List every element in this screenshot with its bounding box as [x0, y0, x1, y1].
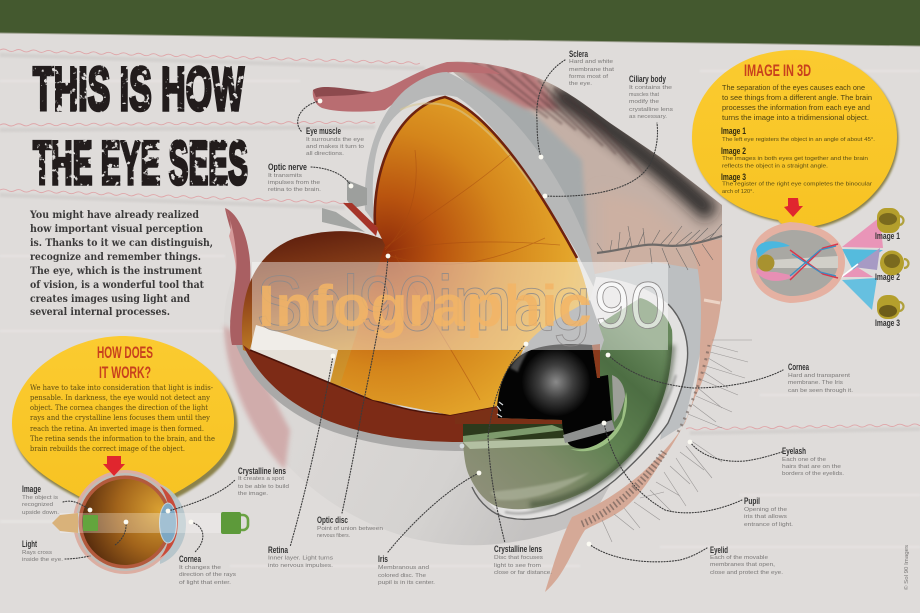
label: image [22, 484, 59, 516]
heading: IMAGE IN 3D [744, 61, 811, 80]
label: image: upside down. [22, 510, 59, 516]
image 2 text: Image 2 [721, 146, 746, 157]
label: crystalline lens: light to see from [494, 563, 541, 569]
labels image 1-3 [875, 231, 900, 328]
body text: reach the retina. An inverted image is then formed. [30, 425, 204, 433]
grey cut band [230, 320, 466, 451]
inverted mug [83, 515, 98, 531]
label: retina: into nervous impulses. [268, 563, 334, 569]
pale stripes in iris [463, 438, 572, 449]
optic nerve [347, 180, 367, 208]
label: ciliary body: Ciliary body [629, 74, 666, 84]
labels image 1-3: Image 3 [875, 318, 900, 328]
image 3 text: arch of 120°. [722, 189, 754, 195]
panel: image in 3D [692, 50, 908, 328]
label: sclera [569, 49, 615, 87]
label: crystalline lens left: It creates a spot [238, 476, 284, 482]
label: sclera: Hard and white [569, 59, 613, 65]
image 2 text [721, 146, 868, 170]
watermark panel: Infographic [258, 274, 592, 339]
green mug [221, 512, 248, 534]
pink skin side [616, 212, 617, 213]
label: eye muscle: It surrounds the eye [306, 137, 364, 143]
label: iris: Iris [378, 554, 388, 564]
body text: object. The cornea changes the direction of the light [30, 404, 208, 412]
label: light: Light [22, 539, 37, 549]
label: cornea: Hard and transparent [788, 373, 851, 379]
intro text: recognize and remember things. [30, 252, 201, 263]
labels image 1-3: Image 2 [875, 272, 900, 282]
label: cornea [788, 362, 853, 394]
body text: processes the information from each eye and [722, 103, 870, 112]
dark slab over iris [463, 422, 572, 445]
label: sclera: the eye. [569, 81, 593, 87]
balloon [12, 336, 238, 500]
green iris [463, 298, 672, 509]
pale wedge [250, 325, 338, 383]
heading: IT WORK? [99, 363, 151, 382]
body text [30, 384, 215, 453]
label: crystalline lens: Disc that focuses [494, 555, 543, 561]
heading [97, 343, 153, 382]
label: cornea: membrane. The Iris [788, 380, 843, 386]
label: eyelash: borders of the eyelids. [782, 471, 844, 477]
body text: We have to take into consideration that light is indis- [30, 384, 214, 392]
light beam [60, 513, 222, 533]
label: optic nerve: Optic nerve [268, 162, 307, 172]
image 2 text: reflects the object in a straight angle. [722, 164, 828, 170]
main eye illustration [224, 55, 752, 592]
label: light: Rays cross [22, 550, 52, 556]
label: eyelash: hairs that are on the [782, 464, 841, 470]
cup 2 [880, 250, 908, 276]
label: pupil [744, 496, 794, 528]
ribs [470, 60, 644, 174]
label: cornea left [179, 554, 236, 586]
label: crystalline lens left: Crystalline lens [238, 466, 286, 476]
intro text: several internal processes. [30, 307, 170, 318]
label: retina: Inner layer. Light turns [268, 556, 333, 562]
lid lash marks [582, 452, 664, 524]
outer sclera surface [447, 62, 722, 345]
eyelid skin strip [545, 240, 722, 592]
eye leader lines and dots [290, 60, 783, 562]
body text: The separation of the eyes causes each one [722, 83, 865, 92]
watermark panel: Sol90imag [256, 259, 591, 347]
balloon [692, 50, 898, 230]
dark rim [555, 92, 712, 214]
credit: © Sol 90 Images [903, 545, 910, 590]
right lashes [602, 340, 752, 542]
label: eye muscle: Eye muscle [306, 126, 341, 136]
intro text [29, 210, 213, 318]
label: optic nerve: It transmits [268, 173, 302, 179]
image 1 text [721, 126, 875, 143]
grey cover above pupil [524, 300, 604, 352]
label: ciliary body: muscles that [629, 92, 659, 98]
pink outer muscle band on the lower left [224, 325, 290, 470]
body text: pensable. In darkness, the eye would not detect any [30, 394, 210, 402]
label: eyelash: Each one of the [782, 457, 826, 463]
left eye muscle [225, 208, 250, 345]
label: crystalline lens left [238, 466, 289, 497]
label: eyelid: membranes that open, [710, 562, 776, 568]
label: sclera: forms most of [569, 74, 609, 80]
label: light: inside the eye. [22, 557, 64, 563]
body text: brain rebuilds the correct image of the object. [30, 445, 185, 453]
label: optic nerve [268, 162, 322, 193]
label: iris: Membranous and [378, 565, 429, 571]
label: iris [378, 554, 436, 586]
label: eyelid [710, 545, 784, 576]
label: crystalline lens: close or far distance. [494, 570, 552, 576]
grey right rim [716, 205, 728, 300]
label: cornea left: direction of the rays [179, 572, 236, 578]
image 3 text: The register of the right eye completes the binocular [722, 182, 872, 188]
retina veins [385, 150, 560, 400]
label: sclera: Sclera [569, 49, 589, 59]
wavy fold lines [0, 49, 920, 435]
grey cut face of sclera [365, 72, 600, 300]
label: optic disc: Point of union between [317, 526, 383, 532]
small eye diagram [52, 456, 248, 574]
label: crystalline lens [494, 544, 552, 576]
body text: rays and the crystalline lens focuses them until they [30, 414, 210, 422]
label: iris: colored disc. The [378, 573, 426, 579]
upper lashes [597, 224, 722, 270]
label: pupil: Pupil [744, 496, 760, 506]
label: optic nerve: impulses from the [268, 180, 320, 186]
label: pupil: Opening of the [744, 507, 787, 513]
body text: to see things from a different angle. The brain [722, 93, 872, 102]
heading: HOW DOES [97, 343, 153, 362]
label: crystalline lens left: to be able to build [238, 484, 289, 490]
label: eyelid: Eyelid [710, 545, 728, 555]
label: crystalline lens left: the image. [238, 491, 269, 497]
cup 3 [877, 295, 904, 319]
pink band over top of the eye [313, 62, 500, 112]
intro text: creates images using light and [30, 294, 190, 305]
label: image: recognized [22, 502, 53, 508]
label: cornea: can be seen through it. [788, 388, 853, 394]
label: optic disc: Optic disc [317, 515, 348, 525]
label: cornea left: of light that enter. [179, 580, 232, 586]
pencil [52, 513, 78, 533]
brown cut band [243, 345, 498, 442]
retina [340, 97, 592, 415]
label: eyelash [782, 446, 844, 477]
labels image 1-3: Image 1 [875, 231, 900, 241]
label: ciliary body: It contains the [629, 85, 672, 91]
label: eyelash: Eyelash [782, 446, 806, 456]
label: image: Image [22, 484, 41, 494]
brown ciliary strip [455, 408, 562, 424]
body text [722, 83, 872, 122]
intro text: The eye, which is the instrument [30, 266, 202, 277]
label: ciliary body [629, 74, 673, 120]
label: eye muscle: all directions. [306, 151, 345, 157]
label: eyelid: close and protect the eye. [710, 570, 784, 576]
label: pupil: entrance of light. [744, 522, 794, 528]
grey sclera under lashes [590, 262, 702, 440]
intro text: of vision, is a wonderful tool that [30, 280, 204, 291]
intro text: You might have already realized [29, 210, 199, 221]
image 1 text: The left eye registers the object in an angle of about 45°. [722, 137, 875, 143]
label: cornea left: Cornea [179, 554, 202, 564]
label: crystalline lens: Crystalline lens [494, 544, 542, 554]
label: sclera: membrane that [569, 67, 615, 73]
label: eye muscle: and makes it turn to [306, 144, 364, 150]
label: eye muscle [306, 126, 364, 157]
intro text: how important visual perception [30, 224, 204, 235]
brain diagram [750, 222, 845, 303]
label: eyelid: Each of the movable [710, 555, 768, 561]
cornea outer ring [463, 277, 688, 519]
text: THE EYE SEES [33, 129, 248, 197]
title [33, 55, 248, 197]
intro text: is. Thanks to it we can distinguish, [30, 238, 213, 249]
grey zone next to the cut [456, 74, 590, 248]
pink rib zone [450, 62, 559, 112]
image 2 text: The images in both eyes get together and the brain [722, 156, 868, 162]
red arrow [103, 456, 125, 476]
label: iris: pupil is in its center. [378, 580, 436, 586]
label: retina: Retina [268, 545, 289, 555]
label: optic nerve: retina to the brain. [268, 187, 322, 193]
watermark panel: 90 [594, 268, 666, 342]
title: THIS IS HOW [33, 55, 244, 123]
label: ciliary body: crystalline lens [629, 107, 673, 113]
label: optic disc: nervous fibers. [317, 533, 350, 539]
label: cornea left: It changes the [179, 565, 221, 571]
lower sclera sphere [224, 280, 640, 545]
cup 1 [877, 208, 904, 233]
panel: how does it work [12, 336, 289, 586]
red arrow [784, 198, 803, 217]
image 1 text: Image 1 [721, 126, 746, 137]
label: cornea: Cornea [788, 362, 810, 372]
body text: turns the image into a tridimensional object. [722, 113, 869, 122]
image 3 text [721, 172, 872, 195]
label: ciliary body: modify the [629, 99, 659, 105]
pupil [497, 344, 615, 449]
body text: The retina sends the information to the brain, and the [30, 435, 215, 443]
inner dome of retina [242, 231, 420, 405]
label: light [22, 539, 64, 563]
label: retina [268, 545, 334, 569]
label: pupil: iris that allows [744, 514, 787, 520]
label: ciliary body: as necessary. [629, 114, 667, 120]
image 3 text: Image 3 [721, 172, 746, 183]
vision cones [840, 217, 883, 310]
label: image: The object is [22, 495, 58, 501]
label: optic disc [317, 515, 383, 539]
